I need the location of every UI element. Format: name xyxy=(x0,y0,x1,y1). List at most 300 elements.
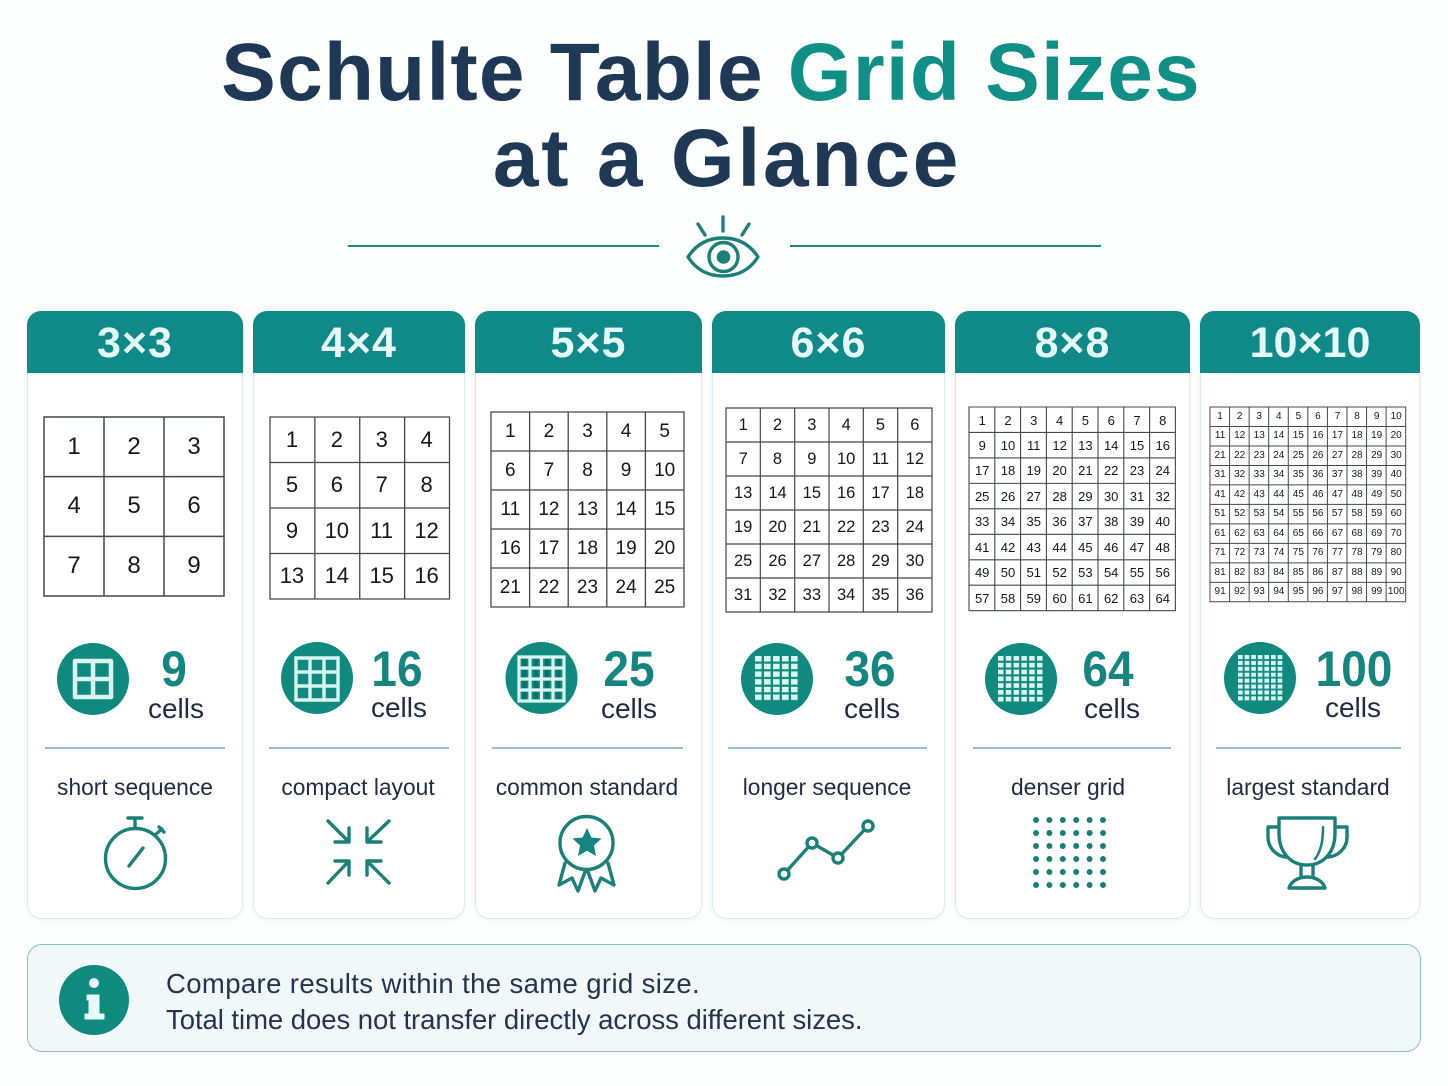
grid: 10x10 table: 54 xyxy=(1273,508,1284,519)
grid: 10x10 table: 63 xyxy=(1254,528,1265,539)
grid: 8x8 table: 3 xyxy=(1030,413,1037,428)
grid: 10x10 table: 75 xyxy=(1293,547,1304,558)
grid: 10x10 table: 11 xyxy=(1215,430,1225,441)
grid: 8x8 table: 63 xyxy=(1130,591,1144,606)
label: short sequence: short sequence xyxy=(57,774,213,800)
grid: 6x6 table: 7 xyxy=(739,450,748,468)
grid: 5x5 table: 4 xyxy=(621,420,631,442)
grid: 8x8 table: 40 xyxy=(1156,514,1170,529)
grid: 8x8 table: 4 xyxy=(1056,413,1063,428)
header: 8x8: 8×8 xyxy=(1035,319,1110,367)
icon: 4x4 grid badge xyxy=(506,642,578,714)
grid: 10x10 table: 76 xyxy=(1312,547,1323,558)
grid: 8x8 table: 32 xyxy=(1156,489,1170,504)
grid: 10x10 table: 3 xyxy=(1256,411,1262,422)
grid: 10x10 table: 58 xyxy=(1351,508,1363,519)
icon: dot matrix xyxy=(1033,817,1106,888)
grid: 10x10 table: 5 xyxy=(1296,411,1301,422)
grid: 8x8 table: 55 xyxy=(1130,565,1144,580)
unit: cells: cells xyxy=(1084,693,1140,724)
grid: 10x10 table: 27 xyxy=(1332,450,1343,461)
grid: 8x8 table: 37 xyxy=(1078,514,1093,529)
grid: 4x4 table: 11 xyxy=(370,518,393,543)
grid: 10x10 table: 18 xyxy=(1351,430,1363,441)
grid: 10x10 table: 81 xyxy=(1215,567,1226,578)
grid: 5x5 table: 19 xyxy=(616,538,637,558)
grid: 4x4 table: 9 xyxy=(286,518,298,543)
grid: 6x6 table: 9 xyxy=(807,450,816,468)
grid: 10x10 table: 45 xyxy=(1293,489,1304,500)
grid: 10x10 table: 49 xyxy=(1371,489,1382,500)
title: at a Glance xyxy=(493,113,961,204)
grid: 10x10 table: 31 xyxy=(1215,469,1226,480)
grid: 10x10 table: 55 xyxy=(1293,508,1304,519)
grid: 8x8 table: 46 xyxy=(1104,540,1118,555)
header: 10x10: 10×10 xyxy=(1250,319,1370,367)
grid: 8x8 table: 58 xyxy=(1001,591,1015,606)
grid: 3x3 table: 7 xyxy=(67,552,81,579)
grid: 3x3 table: 3 xyxy=(187,433,201,460)
grid: 10x10 table: 41 xyxy=(1215,489,1226,500)
grid: 4x4 table: 14 xyxy=(325,563,349,588)
grid: 10x10 table: 74 xyxy=(1273,547,1284,558)
grid: 8x8 table: 52 xyxy=(1052,565,1067,580)
grid: 10x10 table: 23 xyxy=(1254,450,1265,461)
grid: 5x5 table: 6 xyxy=(505,460,516,480)
grid: 8x8 table: 27 xyxy=(1027,489,1041,504)
grid: 10x10 table: 66 xyxy=(1312,528,1323,539)
grid: 10x10 table: 15 xyxy=(1293,430,1304,441)
stat: 36: 36 xyxy=(844,641,896,697)
grid: 6x6 table: 27 xyxy=(803,552,821,570)
divider with eye icon xyxy=(348,215,1101,278)
grid: 10x10 table: 67 xyxy=(1332,528,1343,539)
grid: 10x10 table: 2 xyxy=(1237,411,1242,422)
icon: trophy xyxy=(1266,816,1349,890)
icon: stopwatch xyxy=(104,816,168,890)
grid: 10x10 table: 29 xyxy=(1371,450,1382,461)
grid: 8x8 table: 62 xyxy=(1104,591,1118,606)
grid: 10x10 table: 86 xyxy=(1312,567,1323,578)
label: largest standard: largest standard xyxy=(1226,774,1390,800)
grid: 6x6 table: 22 xyxy=(837,518,855,536)
grid: 10x10 table: 6 xyxy=(1315,411,1321,422)
stat: 25: 25 xyxy=(603,641,655,697)
grid: 6x6 table: 4 xyxy=(842,416,851,434)
grid: 10x10 table: 51 xyxy=(1215,508,1226,519)
grid: 6x6 table: 17 xyxy=(871,484,890,502)
grid: 8x8 table: 59 xyxy=(1027,591,1041,606)
grid: 4x4 table: 4 xyxy=(420,427,433,452)
grid: 10x10 table: 32 xyxy=(1234,469,1245,480)
grid: 10x10 table: 93 xyxy=(1254,586,1265,597)
header: 3x3: 3×3 xyxy=(97,319,173,367)
grid: 10x10 table: 24 xyxy=(1273,450,1284,461)
grid: 10x10 table: 34 xyxy=(1273,469,1284,480)
grid: 4x4 table: 8 xyxy=(420,472,433,497)
unit: cells: cells xyxy=(844,693,900,724)
grid: 10x10 table: 39 xyxy=(1371,469,1382,480)
grid: 10x10 table: 33 xyxy=(1254,469,1265,480)
grid: 4x4 table: 6 xyxy=(331,472,343,497)
grid: 8x8 table: 18 xyxy=(1001,463,1015,478)
grid: 10x10 table: 9 xyxy=(1374,411,1379,422)
grid: 6x6 table: 26 xyxy=(768,552,787,570)
icon: 5x6 grid badge xyxy=(741,643,813,715)
grid: 8x8 table: 16 xyxy=(1156,438,1170,453)
grid: 5x5 table: 23 xyxy=(577,576,598,598)
grid: 4x4 table: 15 xyxy=(369,563,394,588)
grid: 8x8 table: 30 xyxy=(1104,489,1118,504)
grid: 8x8 table: 50 xyxy=(1001,565,1015,580)
header: 10x10 xyxy=(1200,311,1420,373)
grid: 10x10 table: 61 xyxy=(1215,528,1226,539)
panel: 10x10 xyxy=(1200,311,1420,919)
unit: cells: cells xyxy=(371,692,427,723)
icon: award ribbon xyxy=(557,814,616,893)
grid: 10x10 table: 62 xyxy=(1234,528,1245,539)
grid: 4x4 table: 16 xyxy=(414,563,439,588)
grid: 10x10 table: 77 xyxy=(1332,547,1343,558)
grid: 5x5 table: 1 xyxy=(505,420,516,442)
grid: 6x6 table: 35 xyxy=(871,586,890,604)
grid: 8x8 table: 28 xyxy=(1052,489,1067,504)
note text: Compare results within the same grid size. xyxy=(166,968,700,999)
grid: 4x4 table: 7 xyxy=(376,472,388,497)
grid: 6x6 table: 34 xyxy=(837,586,855,604)
grid: 8x8 table: 53 xyxy=(1078,565,1093,580)
grid: 4x4 table: 5 xyxy=(286,472,298,497)
grid: 8x8 table: 20 xyxy=(1052,463,1067,478)
grid: 8x8 table: 12 xyxy=(1052,438,1067,453)
grid: 6x6 table: 3 xyxy=(807,416,816,434)
grid: 6x6 table: 13 xyxy=(734,484,752,502)
grid: 10x10 table: 50 xyxy=(1391,489,1402,500)
grid: 6x6 table: 31 xyxy=(734,586,752,604)
grid: 8x8 table: 35 xyxy=(1027,514,1041,529)
grid: 10x10 table: 83 xyxy=(1254,567,1265,578)
grid: 6x6 table: 10 xyxy=(837,450,855,468)
label: longer sequence: longer sequence xyxy=(743,774,911,800)
grid: 10x10 table: 19 xyxy=(1371,430,1382,441)
grid: 10x10 table: 78 xyxy=(1351,547,1363,558)
grid: 10x10 table: 90 xyxy=(1391,567,1402,578)
header: 6x6: 6×6 xyxy=(791,319,866,367)
grid: 10x10 table: 10 xyxy=(1391,411,1402,422)
grid: 10x10 table: 44 xyxy=(1273,489,1284,500)
grid: 10x10 table: 8 xyxy=(1354,411,1360,422)
grid: 10x10 table: 53 xyxy=(1254,508,1265,519)
grid: 4x4 table: 2 xyxy=(331,427,343,452)
grid: 10x10 table: 94 xyxy=(1273,586,1284,597)
grid: 10x10 table: 98 xyxy=(1351,586,1363,597)
grid: 8x8 table: 56 xyxy=(1156,565,1170,580)
grid: 8x8 table: 11 xyxy=(1027,438,1041,453)
grid: 8x8 table: 36 xyxy=(1052,514,1067,529)
grid: 8x8 table: 10 xyxy=(1001,438,1015,453)
icon: line chart xyxy=(777,819,875,881)
grid: 5x5 table: 13 xyxy=(577,498,598,520)
grid: 8x8 table: 33 xyxy=(975,514,989,529)
grid: 8x8 table: 15 xyxy=(1130,438,1144,453)
grid: 8x8 table: 29 xyxy=(1078,489,1093,504)
header: 3x3 xyxy=(27,311,243,373)
panel: 4x4 xyxy=(253,311,465,919)
label: denser grid: denser grid xyxy=(1011,774,1125,800)
grid: 5x5 table: 2 xyxy=(544,420,554,442)
grid: 8x8 table: 14 xyxy=(1104,438,1118,453)
grid: 5x5 table: 20 xyxy=(654,538,675,558)
stat: 100: 100 xyxy=(1316,641,1392,697)
grid: 6x6 table: 5 xyxy=(876,416,885,434)
grid: 10x10 table: 57 xyxy=(1332,508,1343,519)
grid: 5x5 table: 21 xyxy=(500,576,521,598)
grid: 10x10 table: 91 xyxy=(1215,586,1226,597)
icon: 7x8 grid badge xyxy=(1224,642,1296,714)
grid: 6x6 table: 29 xyxy=(871,552,890,570)
grid: 8x8 table: 39 xyxy=(1130,514,1144,529)
grid: 6x6 table: 2 xyxy=(773,416,782,434)
grid: 10x10 table: 4 xyxy=(1276,411,1282,422)
grid: 5x5 table: 12 xyxy=(538,498,559,520)
grid: 3x3 table: 2 xyxy=(127,433,141,460)
grid: 8x8 table: 31 xyxy=(1130,489,1144,504)
grid: 10x10 table: 96 xyxy=(1312,586,1323,597)
grid: 3x3 table: 6 xyxy=(187,492,201,519)
grid: 8x8 table: 60 xyxy=(1052,591,1067,606)
grid: 4x4 table: 12 xyxy=(414,518,439,543)
grid: 5x5 table: 7 xyxy=(544,460,554,480)
note text xyxy=(166,968,862,1035)
grid: 8x8 table: 51 xyxy=(1027,565,1041,580)
grid: 6x6 table: 24 xyxy=(906,518,924,536)
grid: 6x6 table: 23 xyxy=(871,518,890,536)
grid: 6x6 table: 36 xyxy=(906,586,924,604)
grid: 10x10 table: 43 xyxy=(1254,489,1265,500)
grid: 8x8 table: 21 xyxy=(1078,463,1093,478)
unit: cells: cells xyxy=(1325,692,1381,723)
panel: 6x6 xyxy=(712,311,945,919)
grid: 10x10 table: 69 xyxy=(1371,528,1382,539)
grid: 5x5 table xyxy=(491,412,684,607)
grid: 8x8 table: 6 xyxy=(1108,413,1115,428)
grid: 10x10 table: 30 xyxy=(1391,450,1402,461)
grid: 10x10 table: 52 xyxy=(1234,508,1245,519)
title: Schulte Table Grid Sizes xyxy=(221,27,1201,118)
grid: 6x6 table: 20 xyxy=(768,518,787,536)
grid: 8x8 table: 7 xyxy=(1133,413,1141,428)
icon: 3x3 grid badge xyxy=(281,642,353,714)
panel: 3x3 xyxy=(27,311,243,919)
grid: 8x8 table: 2 xyxy=(1004,413,1012,428)
grid: 6x6 table: 25 xyxy=(734,552,752,570)
header: 5x5 xyxy=(475,311,702,373)
icon: inward arrows xyxy=(326,819,391,885)
grid: 8x8 table: 44 xyxy=(1052,540,1067,555)
grid: 10x10 table: 84 xyxy=(1273,567,1284,578)
grid: 6x6 table: 21 xyxy=(803,518,821,536)
grid: 4x4 table xyxy=(270,417,449,599)
icon: info xyxy=(59,965,129,1035)
grid: 8x8 table: 47 xyxy=(1130,540,1144,555)
grid: 10x10 table: 16 xyxy=(1312,430,1323,441)
grid: 5x5 table: 24 xyxy=(616,576,637,598)
grid: 10x10 table: 38 xyxy=(1351,469,1363,480)
grid: 5x5 table: 9 xyxy=(621,460,631,480)
grid: 5x5 table: 17 xyxy=(538,538,559,558)
grid: 6x6 table: 14 xyxy=(768,484,787,502)
grid: 10x10 table: 68 xyxy=(1351,528,1363,539)
grid: 8x8 table: 48 xyxy=(1156,540,1170,555)
grid: 8x8 table: 38 xyxy=(1104,514,1118,529)
grid: 10x10 table: 28 xyxy=(1351,450,1363,461)
header: 8x8 xyxy=(955,311,1190,373)
grid: 10x10 table: 88 xyxy=(1351,567,1363,578)
grid: 10x10 table: 89 xyxy=(1371,567,1382,578)
grid: 10x10 table: 42 xyxy=(1234,489,1245,500)
grid: 10x10 table: 21 xyxy=(1215,450,1226,461)
grid: 6x6 table: 6 xyxy=(910,416,919,434)
grid: 10x10 table: 87 xyxy=(1332,567,1343,578)
grid: 8x8 table: 9 xyxy=(979,438,986,453)
grid: 10x10 table: 13 xyxy=(1254,430,1265,441)
grid: 3x3 table: 8 xyxy=(127,552,141,579)
header: 4x4: 4×4 xyxy=(321,319,397,367)
grid: 10x10 table: 79 xyxy=(1371,547,1382,558)
grid: 10x10 table: 25 xyxy=(1293,450,1304,461)
grid: 8x8 table: 43 xyxy=(1027,540,1041,555)
grid: 10x10 table: 14 xyxy=(1273,430,1284,441)
grid: 10x10 table: 12 xyxy=(1234,430,1245,441)
grid: 10x10 table: 35 xyxy=(1293,469,1304,480)
grid: 10x10 table: 60 xyxy=(1391,508,1402,519)
grid: 8x8 table: 24 xyxy=(1156,463,1170,478)
grid: 10x10 table: 65 xyxy=(1293,528,1304,539)
grid: 6x6 table: 32 xyxy=(768,586,787,604)
grid: 10x10 table: 56 xyxy=(1312,508,1323,519)
grid: 6x6 table: 19 xyxy=(734,518,752,536)
grid: 6x6 table: 28 xyxy=(837,552,855,570)
header: 6x6 xyxy=(712,311,945,373)
grid: 6x6 table: 1 xyxy=(739,416,748,434)
grid: 10x10 table: 64 xyxy=(1273,528,1284,539)
grid: 8x8 table: 54 xyxy=(1104,565,1118,580)
grid: 8x8 table: 57 xyxy=(975,591,989,606)
grid: 5x5 table: 15 xyxy=(654,498,675,520)
grid: 6x6 table: 16 xyxy=(837,484,855,502)
grid: 10x10 table: 17 xyxy=(1332,430,1343,441)
grid: 10x10 table: 48 xyxy=(1351,489,1363,500)
grid: 5x5 table: 16 xyxy=(500,538,521,558)
grid: 3x3 table xyxy=(44,417,224,596)
grid: 10x10 table xyxy=(1210,406,1406,601)
grid: 4x4 table: 3 xyxy=(376,427,388,452)
grid: 10x10 table: 37 xyxy=(1332,469,1343,480)
grid: 10x10 table: 20 xyxy=(1391,430,1402,441)
grid: 8x8 table: 25 xyxy=(975,489,989,504)
grid: 10x10 table: 72 xyxy=(1234,547,1245,558)
grid: 10x10 table: 36 xyxy=(1312,469,1323,480)
grid: 5x5 table: 25 xyxy=(654,576,675,598)
grid: 8x8 table: 61 xyxy=(1078,591,1093,606)
grid: 8x8 table: 13 xyxy=(1078,438,1093,453)
grid: 10x10 table: 1 xyxy=(1217,411,1223,422)
grid: 10x10 table: 46 xyxy=(1312,489,1323,500)
grid: 8x8 table: 41 xyxy=(975,540,989,555)
grid: 5x5 table: 11 xyxy=(500,498,520,520)
stat: 16: 16 xyxy=(371,641,423,697)
grid: 6x6 table: 8 xyxy=(773,450,782,468)
grid: 4x4 table: 10 xyxy=(325,518,349,543)
title xyxy=(221,27,1201,204)
callout xyxy=(27,944,1421,1052)
grid: 10x10 table: 85 xyxy=(1293,567,1304,578)
grid: 8x8 table: 1 xyxy=(979,413,986,428)
stat: 9: 9 xyxy=(161,641,187,697)
grid: 10x10 table: 71 xyxy=(1215,547,1226,558)
grid: 10x10 table: 47 xyxy=(1332,489,1343,500)
grid: 4x4 table: 1 xyxy=(286,427,298,452)
grid: 6x6 table xyxy=(726,408,932,612)
grid: 10x10 table: 70 xyxy=(1391,528,1402,539)
grid: 10x10 table: 82 xyxy=(1234,567,1245,578)
grid: 6x6 table: 15 xyxy=(803,484,821,502)
unit: cells: cells xyxy=(148,693,204,724)
grid: 8x8 table xyxy=(969,407,1176,611)
grid: 10x10 table: 99 xyxy=(1371,586,1382,597)
label: common standard: common standard xyxy=(496,774,678,800)
grid: 10x10 table: 92 xyxy=(1234,586,1245,597)
grid: 10x10 table: 26 xyxy=(1312,450,1323,461)
grid: 10x10 table: 7 xyxy=(1335,411,1340,422)
grid: 6x6 table: 33 xyxy=(803,586,821,604)
grid: 6x6 table: 12 xyxy=(906,450,924,468)
grid: 8x8 table: 34 xyxy=(1001,514,1015,529)
stat: 64: 64 xyxy=(1082,641,1134,697)
grid: 3x3 table: 9 xyxy=(187,552,201,579)
grid: 8x8 table: 19 xyxy=(1027,463,1041,478)
header: 4x4 xyxy=(253,311,465,373)
grid: 8x8 table: 8 xyxy=(1159,413,1166,428)
note text: Total time does not transfer directly across different sizes. xyxy=(166,1004,862,1034)
grid: 8x8 table: 45 xyxy=(1078,540,1093,555)
grid: 8x8 table: 42 xyxy=(1001,540,1015,555)
grid: 10x10 table: 59 xyxy=(1371,508,1382,519)
grid: 5x5 table: 14 xyxy=(616,498,637,520)
grid: 5x5 table: 22 xyxy=(538,576,559,598)
grid: 10x10 table: 73 xyxy=(1254,547,1265,558)
grid: 5x5 table: 5 xyxy=(659,420,670,442)
grid: 10x10 table: 40 xyxy=(1391,469,1402,480)
grid: 3x3 table: 4 xyxy=(67,492,81,519)
grid: 10x10 table: 80 xyxy=(1391,547,1402,558)
panel: 5x5 xyxy=(475,311,702,919)
grid: 8x8 table: 5 xyxy=(1082,413,1089,428)
grid: 6x6 table: 30 xyxy=(906,552,924,570)
grid: 5x5 table: 10 xyxy=(654,460,675,480)
grid: 8x8 table: 17 xyxy=(975,463,989,478)
grid: 8x8 table: 26 xyxy=(1001,489,1015,504)
grid: 10x10 table: 22 xyxy=(1234,450,1245,461)
unit: cells: cells xyxy=(601,693,657,724)
grid: 8x8 table: 23 xyxy=(1130,463,1144,478)
grid: 5x5 table: 18 xyxy=(577,538,598,558)
grid: 4x4 table: 13 xyxy=(280,563,304,588)
grid: 8x8 table: 64 xyxy=(1156,591,1170,606)
grid: 5x5 table: 8 xyxy=(582,460,593,480)
panel: 8x8 xyxy=(955,311,1190,919)
grid: 10x10 table: 95 xyxy=(1293,586,1304,597)
